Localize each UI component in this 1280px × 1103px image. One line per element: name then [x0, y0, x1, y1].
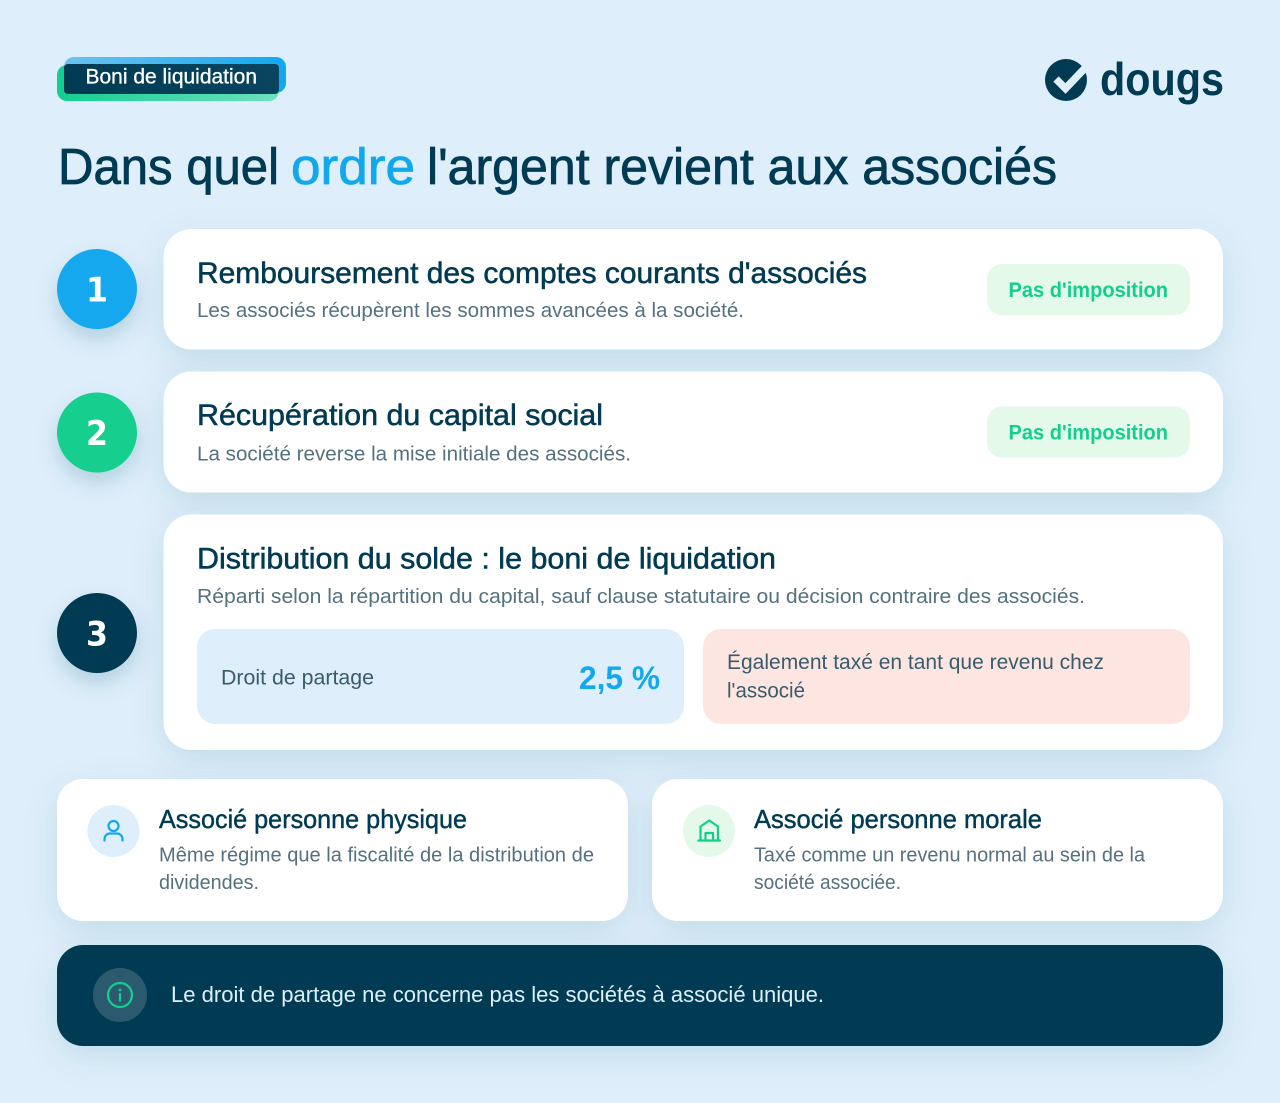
text: Même régime que la fiscalité de la distribution de	[159, 844, 594, 866]
step 3 number: 3	[86, 614, 108, 654]
panel: step 3	[164, 514, 1223, 750]
panel: step 2	[164, 372, 1223, 492]
text: Le droit de partage ne concerne pas les sociétés à associé unique.	[171, 982, 824, 1007]
title: ordre	[291, 138, 415, 195]
box: also taxed: Également taxé en tant que revenu chez	[727, 651, 1104, 674]
text: société associée.	[754, 871, 901, 894]
logo: dougs: dougs	[1100, 53, 1224, 105]
box: also taxed	[703, 629, 1190, 724]
logo: dougs	[1045, 53, 1224, 105]
text: step 2: La société reverse la mise initiale des associés.	[197, 442, 631, 466]
title: l'argent revient aux associés	[427, 138, 1057, 195]
banner: note	[57, 945, 1223, 1046]
box: droit de partage: Droit de partage	[221, 666, 374, 690]
heading: Associé personne morale	[754, 804, 1042, 834]
title	[58, 138, 1057, 195]
heading: step 1: Remboursement des comptes courants d'associés	[197, 257, 867, 290]
badge: no tax	[987, 264, 1190, 315]
box: droit de partage: 2,5 %	[579, 660, 660, 696]
text: step 1: Les associés récupèrent les sommes avancées à la société.	[197, 299, 744, 322]
panel: step 1	[164, 229, 1223, 350]
step 3 number	[57, 593, 137, 673]
icon: info	[93, 968, 147, 1022]
badge: no tax	[987, 406, 1190, 458]
text	[159, 844, 594, 894]
tag: Boni de liquidation	[57, 57, 286, 101]
title: Dans quel	[58, 138, 279, 195]
icon: building	[683, 805, 735, 857]
text: step 3: Réparti selon la répartition du capital, sauf clause statutaire ou décision contraire des associés.	[197, 585, 1085, 608]
text: Taxé comme un revenu normal au sein de la	[754, 844, 1146, 866]
heading: step 2: Récupération du capital social	[197, 399, 603, 432]
box: droit de partage	[197, 629, 684, 724]
step 1 number	[57, 249, 137, 329]
badge: no tax: Pas d'imposition	[1008, 279, 1168, 302]
tag: Boni de liquidation: Boni de liquidation	[86, 66, 257, 88]
step 2 number	[57, 392, 137, 472]
badge: no tax: Pas d'imposition	[1008, 422, 1168, 444]
heading: step 3: Distribution du solde : le boni de liquidation	[197, 542, 776, 576]
step 2 number: 2	[86, 414, 108, 454]
step 1 number: 1	[86, 270, 108, 310]
text	[754, 844, 1146, 894]
icon: person	[88, 805, 140, 857]
heading: Associé personne physique	[159, 804, 467, 834]
panel: associé personne physique	[57, 779, 628, 921]
text: dividendes.	[159, 871, 259, 894]
panel: associé personne morale	[652, 779, 1223, 921]
box: also taxed: l'associé	[727, 680, 805, 702]
